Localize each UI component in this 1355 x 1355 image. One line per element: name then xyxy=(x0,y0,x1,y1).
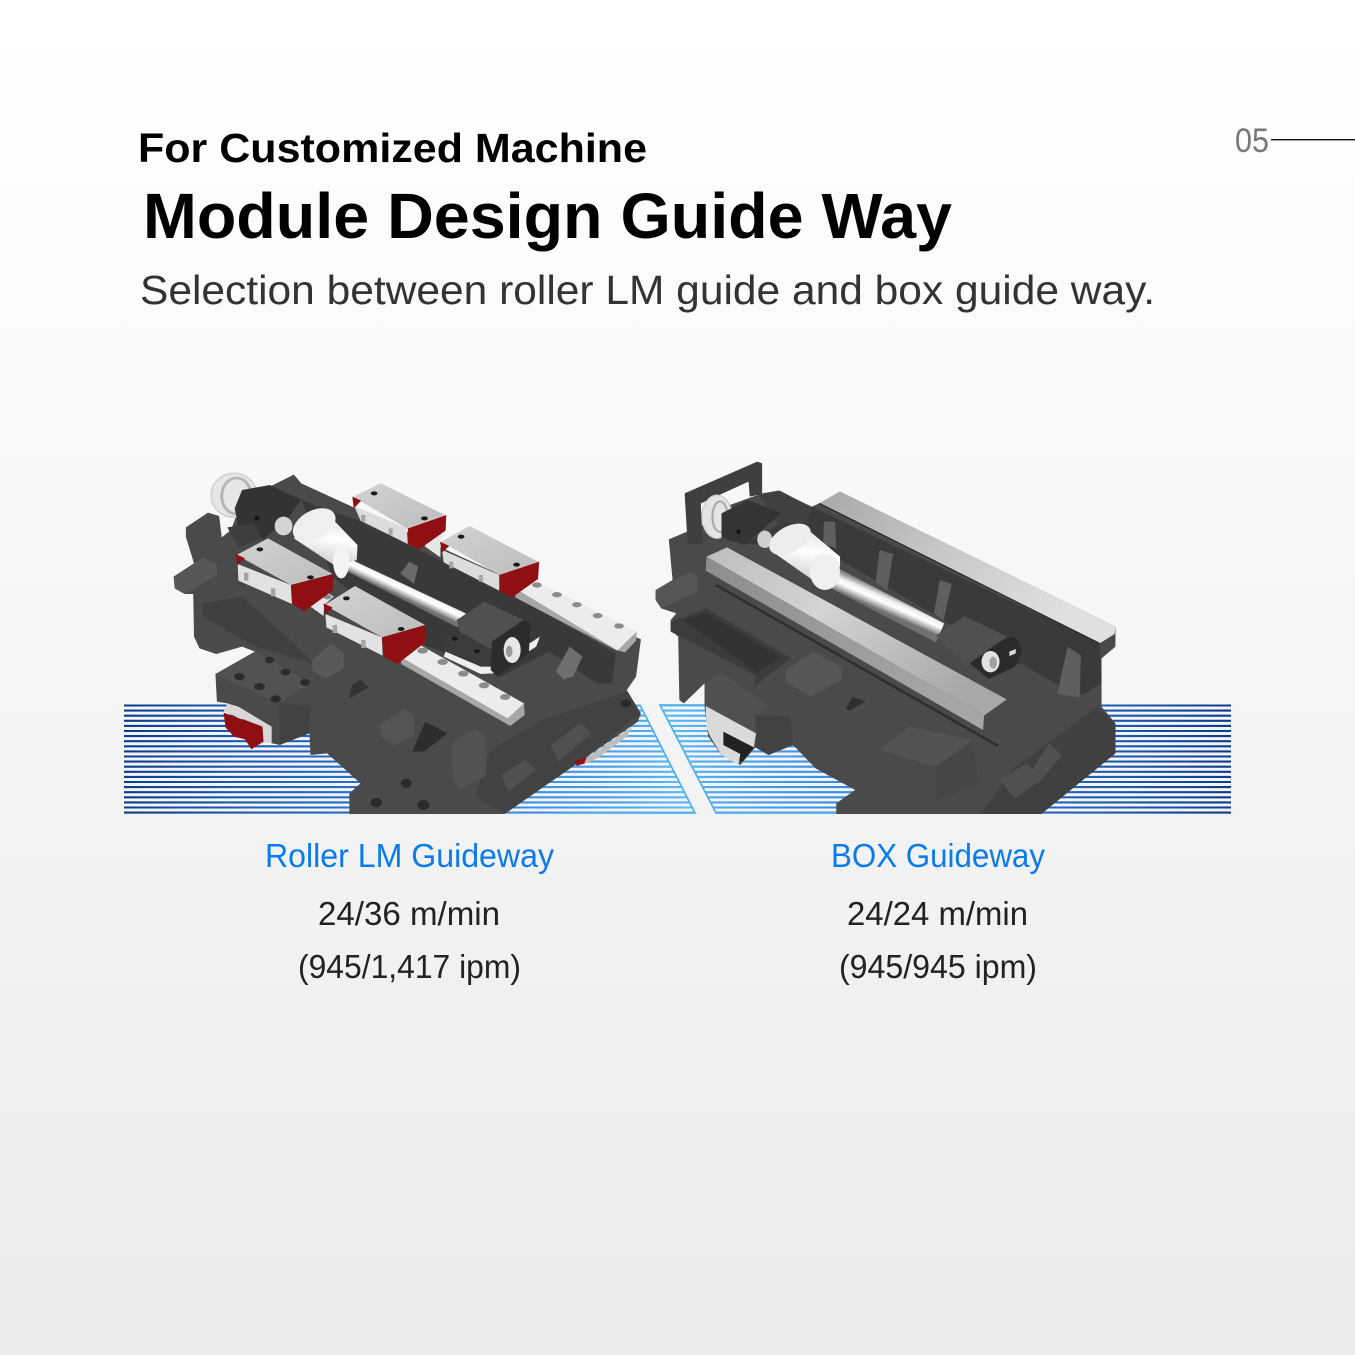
spec: roller speed ipm: (945/1,417 ipm) xyxy=(298,948,521,985)
machine: box guideway xyxy=(656,462,1115,814)
label: box guideway: BOX Guideway xyxy=(831,837,1045,874)
rear frame handle xyxy=(685,462,762,544)
ball screw shaft xyxy=(819,567,944,642)
page number with rule: 05 xyxy=(1235,122,1269,160)
wedge ribs xyxy=(400,562,582,679)
machine silhouette casting xyxy=(174,475,641,814)
casting shading and lugs xyxy=(174,557,641,813)
bottom far carriage xyxy=(574,727,632,766)
label: roller LM guideway: Roller LM Guideway xyxy=(265,837,554,874)
rear bearing housing and coupling xyxy=(211,473,301,547)
striped floor: left xyxy=(124,705,700,813)
spec: box speed ipm: (945/945 ipm) xyxy=(839,948,1037,985)
front silver box way xyxy=(706,547,1007,746)
mounting holes xyxy=(234,657,631,810)
ball nut xyxy=(757,517,840,590)
guide block: rear right xyxy=(440,526,539,597)
spec: roller speed m/min: 24/36 m/min xyxy=(318,895,500,932)
heading: main title: Module Design Guide Way xyxy=(143,180,952,252)
guide block: front right xyxy=(323,586,426,664)
silver end plate xyxy=(706,706,756,765)
support ribs xyxy=(823,522,1081,697)
spec: box speed m/min: 24/24 m/min xyxy=(847,895,1028,932)
front end bearing block xyxy=(444,602,540,677)
guide block: front left xyxy=(236,538,333,611)
casting shading and lugs xyxy=(656,572,1115,814)
front end bearing block xyxy=(936,616,1023,679)
trough interior xyxy=(301,500,616,683)
machine: roller LM guideway xyxy=(174,473,641,814)
text: description: Selection between roller LM guide and box guide way. xyxy=(140,267,1155,313)
front linear rail xyxy=(311,590,525,726)
machine silhouette casting xyxy=(656,491,1115,814)
ball screw shaft xyxy=(335,553,466,627)
heading: subtitle kicker: For Customized Machine xyxy=(138,125,647,171)
ball nut xyxy=(275,501,358,578)
back wall interior xyxy=(744,507,1102,695)
bottom left carriage, red and silver xyxy=(224,703,272,749)
page number with rule xyxy=(1235,122,1355,160)
rear silver box way xyxy=(819,492,1115,643)
guide block: rear left xyxy=(352,483,446,549)
rear bearing housing and coupling xyxy=(702,491,812,545)
back linear rail xyxy=(425,530,637,652)
striped floor: right xyxy=(655,705,1231,813)
